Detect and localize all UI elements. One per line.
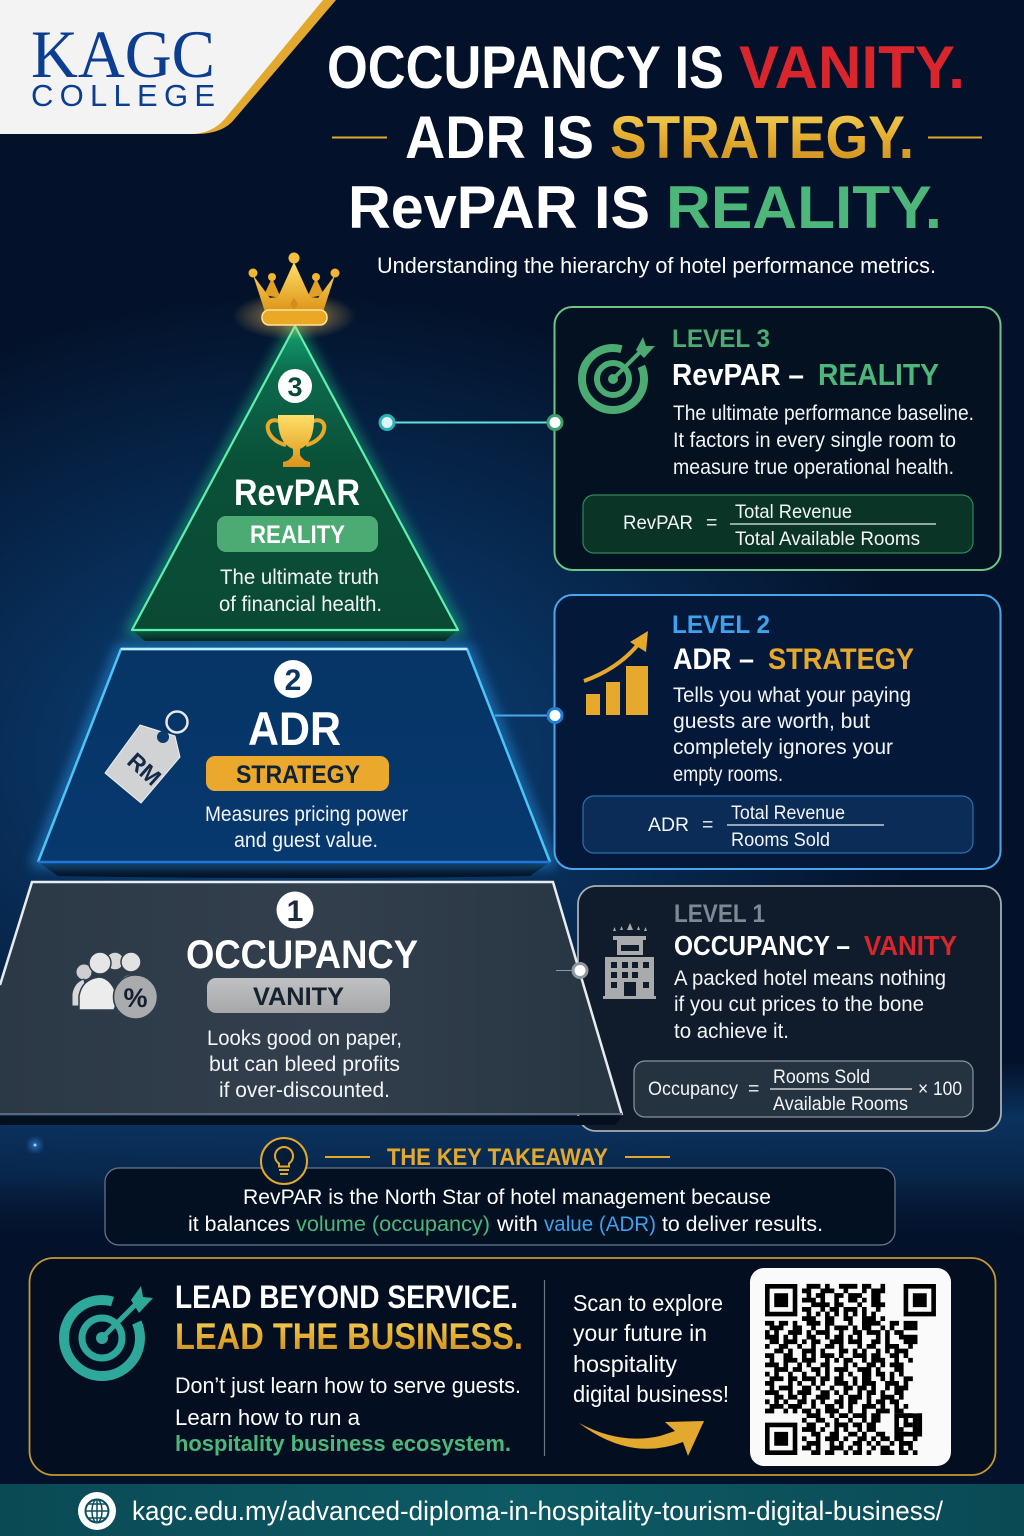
icon: crown (232, 252, 356, 340)
pill: vanity (207, 978, 390, 1013)
card heading: RevPAR – (672, 357, 804, 392)
icon: people and percent (72, 952, 158, 1019)
title (327, 34, 982, 241)
formula: occupancy: Available Rooms (773, 1093, 908, 1115)
icon: light bulb (261, 1138, 307, 1184)
level label: LEVEL 1 (674, 900, 765, 928)
text: ADR description: Measures pricing power (205, 803, 408, 826)
level label: LEVEL 2 (672, 611, 770, 639)
card heading (672, 357, 939, 392)
formula: ADR: Total Revenue (731, 802, 845, 824)
formula: occupancy: Occupancy (648, 1078, 738, 1100)
icon: globe (78, 1492, 116, 1530)
icon: target (582, 337, 655, 410)
formula: RevPAR: RevPAR (623, 512, 693, 534)
card text: guests are worth, but (673, 710, 870, 733)
card heading: STRATEGY (768, 643, 914, 676)
pyramid tier 3: RevPAR (132, 326, 458, 641)
card text (674, 967, 946, 1043)
text: ADR description (205, 803, 408, 852)
number badge 2 (274, 660, 312, 698)
supporting text: Don’t just learn how to serve guests. (175, 1373, 521, 1398)
text: RevPAR description: The ultimate truth (220, 566, 379, 589)
formula: occupancy: × 100 (918, 1078, 962, 1100)
text: occupancy description (207, 1027, 402, 1102)
supporting text (175, 1373, 521, 1456)
subtitle: Understanding the hierarchy of hotel performance metrics. (377, 253, 936, 278)
formula: RevPAR (583, 495, 973, 553)
icon: teal target (64, 1286, 153, 1376)
pyramid tier 1: occupancy (0, 882, 622, 1125)
takeaway text: with (496, 1212, 538, 1236)
title: STRATEGY. (610, 104, 914, 171)
formula: occupancy: Rooms Sold (773, 1066, 870, 1088)
title: VANITY. (739, 34, 965, 101)
formula: occupancy: = (748, 1078, 759, 1100)
card text (673, 684, 911, 786)
arrow to QR (579, 1421, 704, 1456)
card heading: VANITY (864, 930, 957, 961)
text: RevPAR description: of financial health. (219, 593, 382, 616)
number badge 3 (278, 369, 312, 403)
heading: ADR: ADR (248, 702, 341, 755)
panel: key takeaway (105, 1138, 895, 1245)
card heading: ADR – (673, 643, 754, 676)
website URL: kagc.edu.my/advanced-diploma-in-hospitality-tourism-digital-business/ (132, 1496, 943, 1526)
number badge 1 (276, 892, 314, 928)
card text: A packed hotel means nothing (674, 967, 946, 990)
card heading: OCCUPANCY – (674, 930, 850, 961)
number badge 1: 1 (287, 895, 303, 928)
card heading: REALITY (818, 357, 939, 392)
icon: people and percent: % (123, 983, 148, 1013)
supporting text: Learn how to run a (175, 1405, 361, 1430)
formula: RevPAR: = (706, 512, 717, 534)
takeaway text: to deliver results. (662, 1212, 823, 1236)
formula: RevPAR: Total Available Rooms (735, 528, 920, 550)
headline: LEAD THE BUSINESS. (175, 1316, 523, 1357)
headline (175, 1279, 523, 1357)
logo wordmark COLLEGE: COLLEGE (31, 78, 215, 113)
formula: ADR: ADR (648, 814, 689, 836)
formula: RevPAR: Total Revenue (735, 501, 852, 523)
logo panel (0, 0, 336, 134)
card text: to achieve it. (674, 1020, 789, 1043)
card text: completely ignores your (673, 736, 893, 759)
text: occupancy description: if over-discounted. (219, 1079, 390, 1102)
text: ADR description: and guest value. (234, 829, 378, 852)
QR code (750, 1268, 951, 1466)
number badge 2: 2 (285, 664, 301, 697)
card text: The ultimate performance baseline. (673, 402, 974, 425)
icon: RM price tag: RM (122, 747, 166, 791)
headline: LEAD BEYOND SERVICE. (175, 1279, 518, 1315)
scan text: digital business! (573, 1381, 729, 1407)
panel: level 2 card (495, 595, 1000, 869)
card heading (673, 643, 914, 676)
pill: strategy (206, 756, 389, 791)
title: REALITY. (666, 174, 942, 241)
takeaway text: RevPAR is the North Star of hotel management because (243, 1185, 771, 1209)
card text: measure true operational health. (673, 456, 954, 479)
scan text: hospitality (573, 1351, 678, 1377)
pill: reality: REALITY (250, 521, 345, 549)
card text: if you cut prices to the bone (674, 993, 924, 1016)
scan text (573, 1290, 729, 1407)
heading: RevPAR: RevPAR (234, 472, 360, 513)
text: occupancy description: but can bleed profits (209, 1053, 400, 1076)
pill: reality (217, 516, 378, 552)
card text: It factors in every single room to (673, 429, 956, 452)
formula: occupancy (634, 1061, 973, 1117)
pill: strategy: STRATEGY (236, 761, 360, 789)
formula: ADR: = (702, 814, 713, 836)
title: RevPAR IS (348, 174, 650, 241)
panel: level 1 card (578, 886, 1001, 1131)
connector: RevPAR to level 3 (380, 416, 550, 430)
scan text: Scan to explore (573, 1290, 723, 1316)
icon: RM price tag (105, 712, 188, 803)
footer bar (0, 1484, 1024, 1536)
title: OCCUPANCY IS (327, 34, 724, 101)
pyramid tier 2: ADR (38, 649, 550, 878)
title: ADR IS (405, 104, 594, 171)
heading: occupancy: OCCUPANCY (186, 933, 418, 977)
text: occupancy description: Looks good on paper, (207, 1027, 402, 1050)
takeaway text: volume (occupancy) (296, 1212, 490, 1236)
card text: Tells you what your paying (673, 684, 911, 707)
icon: rising bars (584, 631, 648, 715)
text: RevPAR description (219, 566, 382, 616)
panel: call to action (30, 1258, 996, 1475)
icon: trophy (268, 415, 324, 467)
card text: empty rooms. (673, 763, 783, 786)
logo wordmark KAGC: KAGC (31, 16, 215, 92)
takeaway text: it balances (188, 1212, 290, 1236)
icon: hotel (603, 923, 656, 999)
supporting text: hospitality business ecosystem. (175, 1431, 511, 1456)
level label: LEVEL 3 (672, 325, 770, 353)
takeaway text: value (ADR) (544, 1212, 656, 1236)
connector: occupancy to level 1 (556, 964, 587, 978)
takeaway text (188, 1185, 823, 1236)
panel: level 3 card (548, 307, 1000, 570)
heading: the key takeaway: THE KEY TAKEAWAY (387, 1144, 608, 1171)
pill: vanity: VANITY (253, 983, 344, 1011)
formula: ADR (583, 796, 973, 853)
number badge 3: 3 (287, 372, 303, 402)
card text (673, 402, 974, 479)
scan text: your future in (573, 1320, 707, 1346)
formula: ADR: Rooms Sold (731, 829, 830, 851)
